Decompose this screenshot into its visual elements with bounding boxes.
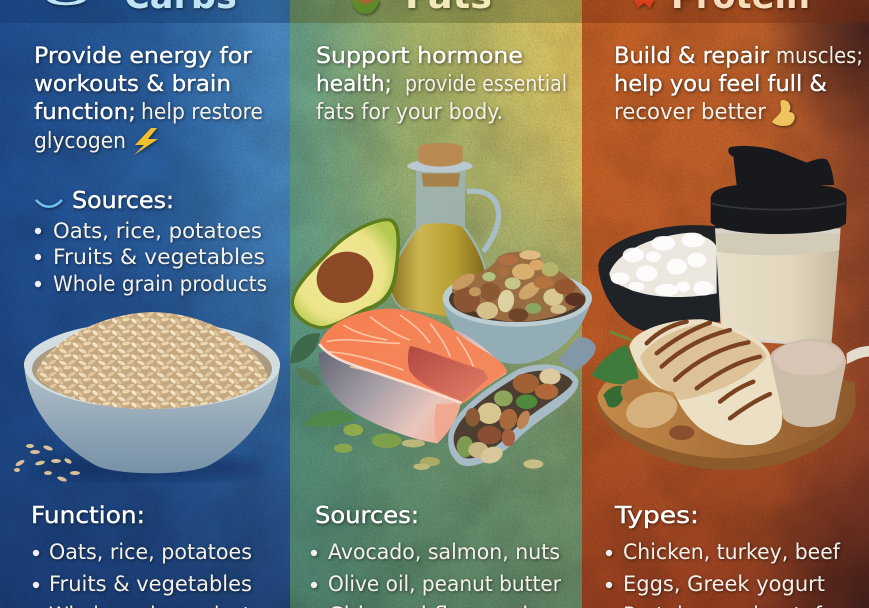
spilled grains — [14, 444, 80, 483]
protein types list: Eggs, Greek yogurt — [623, 572, 825, 596]
panel: carbs text — [34, 0, 267, 296]
fats sources list: Avocado, salmon, nuts — [328, 540, 560, 564]
carbs description: workouts & brain — [34, 72, 231, 97]
carbs sources list: Oats, rice, potatoes — [53, 219, 262, 243]
heading: fats sources: Sources: — [315, 503, 419, 529]
fats description: fats for your body. — [316, 100, 503, 125]
carbs description: glycogen — [34, 129, 126, 154]
scoop of nuts — [448, 337, 596, 466]
fats sources list — [311, 540, 561, 608]
protein types list: Chicken, turkey, beef — [623, 540, 841, 564]
protein food illustration — [592, 146, 869, 470]
carbs description: help restore — [141, 100, 263, 125]
icon: sources bowl — [36, 200, 62, 207]
avocado half — [291, 218, 400, 329]
icon: carbs bowl — [47, 0, 86, 5]
herb leaves — [592, 332, 639, 408]
fats sources text — [311, 503, 561, 608]
heading: Function: Function: — [31, 503, 145, 529]
fats description: Support hormone — [316, 44, 523, 69]
fats food illustration — [290, 143, 596, 470]
grilled chicken breast — [629, 319, 782, 445]
carbs sources list — [35, 219, 267, 296]
icon: avocado — [352, 0, 379, 14]
protein description: Build & repair — [614, 44, 770, 69]
protein description: recover better — [614, 100, 767, 125]
nuts on board — [621, 379, 694, 440]
fats description: health; — [316, 72, 392, 97]
olive oil bottle — [390, 143, 499, 317]
protein description: help you feel full & — [614, 72, 827, 97]
protein types text — [606, 503, 841, 608]
panel: fats background — [290, 0, 582, 608]
function list: Oats, rice, potatoes — [49, 540, 252, 564]
panel: protein text — [614, 0, 863, 126]
wooden board — [597, 353, 856, 470]
protein types list — [606, 540, 841, 608]
panel: protein background — [582, 0, 869, 608]
fats sources list: Olive oil, peanut butter — [328, 572, 561, 596]
fats description: provide essential — [405, 72, 567, 97]
panel: fats text — [316, 0, 567, 125]
icon: lightning — [134, 128, 158, 155]
carbs sources list: Fruits & vegetables — [53, 245, 265, 269]
protein shaker — [711, 146, 847, 347]
heading: Types: Types: — [614, 503, 699, 529]
scoop of protein powder — [770, 338, 869, 427]
carbs function text — [31, 503, 261, 608]
leaves — [290, 333, 543, 470]
icon: flexed bicep — [772, 100, 795, 126]
icon: muscle arm — [634, 0, 654, 8]
function list: Fruits & vegetables — [49, 572, 252, 596]
function list — [33, 540, 261, 608]
carbs sources list: Whole grain products — [53, 272, 267, 296]
salmon steak — [319, 308, 507, 443]
protein description — [614, 44, 863, 125]
heading: carbs sources: Sources: — [72, 188, 174, 214]
dark bowl of cottage cheese — [598, 225, 720, 332]
fats description — [316, 44, 567, 125]
carbs description: Provide energy for — [34, 44, 253, 69]
bowl of rice — [14, 312, 280, 483]
carbs description — [34, 44, 263, 154]
bowl of nuts — [443, 250, 592, 364]
carbs description: function; — [34, 100, 136, 125]
panel: carbs background — [0, 0, 290, 608]
